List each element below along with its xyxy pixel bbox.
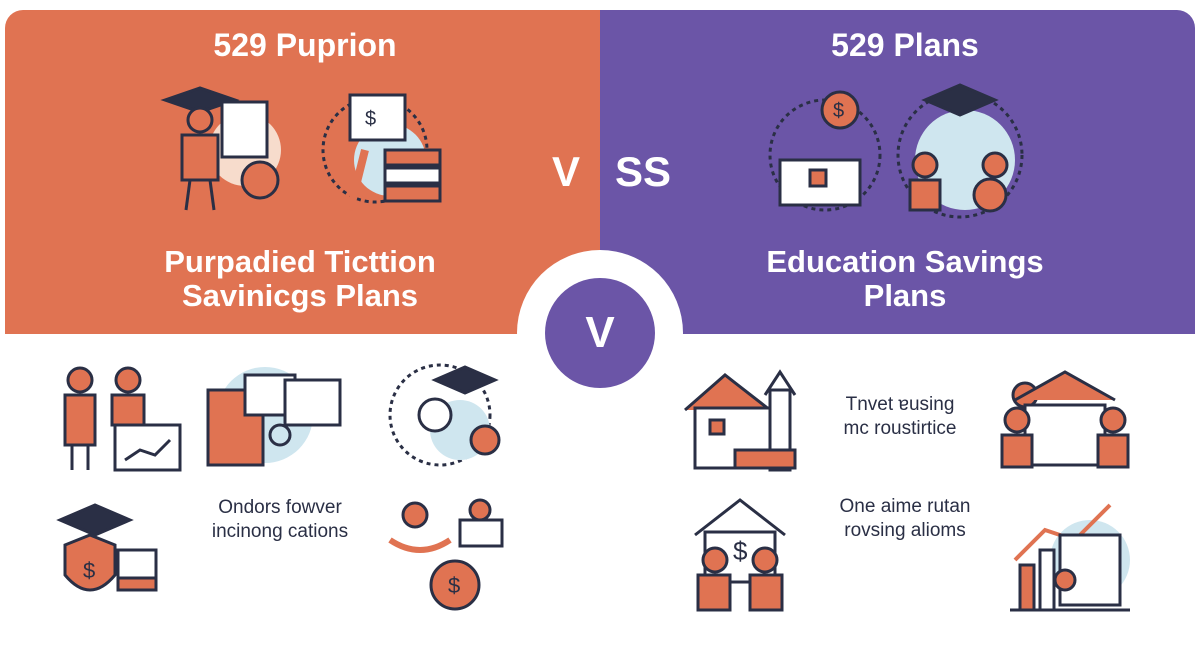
subtitle: right: Education Savings xyxy=(766,244,1044,279)
icon: bank and coin: $ xyxy=(833,100,844,122)
vs text: V SS xyxy=(552,148,671,195)
icon: shield cap: $ xyxy=(83,558,95,583)
text: bottom left label: incinong cations xyxy=(212,521,348,542)
subtitle: left: Purpadied Ticttion xyxy=(164,244,436,279)
icon: shield cap xyxy=(60,505,156,590)
subtitle: left: Savinicgs Plans xyxy=(182,278,418,313)
text: right label 2: rovsing alioms xyxy=(844,520,966,541)
text: right label 1 xyxy=(844,394,956,439)
badge: center V xyxy=(545,278,655,388)
subtitle: left xyxy=(164,244,436,313)
heading: left: 529 Puprion xyxy=(213,27,397,63)
icon: graduate clock xyxy=(390,365,499,465)
icons top left xyxy=(160,86,442,210)
subtitle: right: Plans xyxy=(864,278,946,313)
icons top right xyxy=(768,84,1024,218)
icon: books and money xyxy=(323,95,440,210)
icon: gears people: $ xyxy=(448,573,460,598)
icons bottom left xyxy=(56,364,504,610)
icon: house dollar family xyxy=(695,500,785,610)
center notch xyxy=(517,250,683,416)
icon: house arrow xyxy=(685,372,795,470)
panel: right purple xyxy=(600,10,1195,334)
text: bottom left label xyxy=(212,497,348,542)
text: right label 2 xyxy=(840,496,970,541)
text: bottom left label: Ondors fowver xyxy=(218,497,342,518)
text: right label 2: One aime rutan xyxy=(840,496,970,517)
text: right label 1: Tnvet ɐusing xyxy=(846,394,954,415)
icons bottom right xyxy=(684,369,1130,612)
icon: notebook xyxy=(208,367,340,465)
icon: bank and coin xyxy=(770,92,880,210)
icon: graduate with board xyxy=(165,88,281,210)
panel: left orange xyxy=(5,10,602,334)
icon: bank family xyxy=(1002,372,1128,467)
icon: books and money: $ xyxy=(365,108,376,130)
icon: house dollar family: $ xyxy=(733,536,748,566)
subtitle: right xyxy=(766,244,1044,313)
icon: bar chart key xyxy=(1010,505,1130,610)
icon: gears people xyxy=(390,500,502,609)
icon: graduates xyxy=(898,85,1022,217)
heading: right: 529 Plans xyxy=(831,27,979,63)
icon: people with chart xyxy=(65,368,180,470)
badge: center V: V xyxy=(585,308,615,357)
text: right label 1: mc roustirtice xyxy=(844,418,956,439)
